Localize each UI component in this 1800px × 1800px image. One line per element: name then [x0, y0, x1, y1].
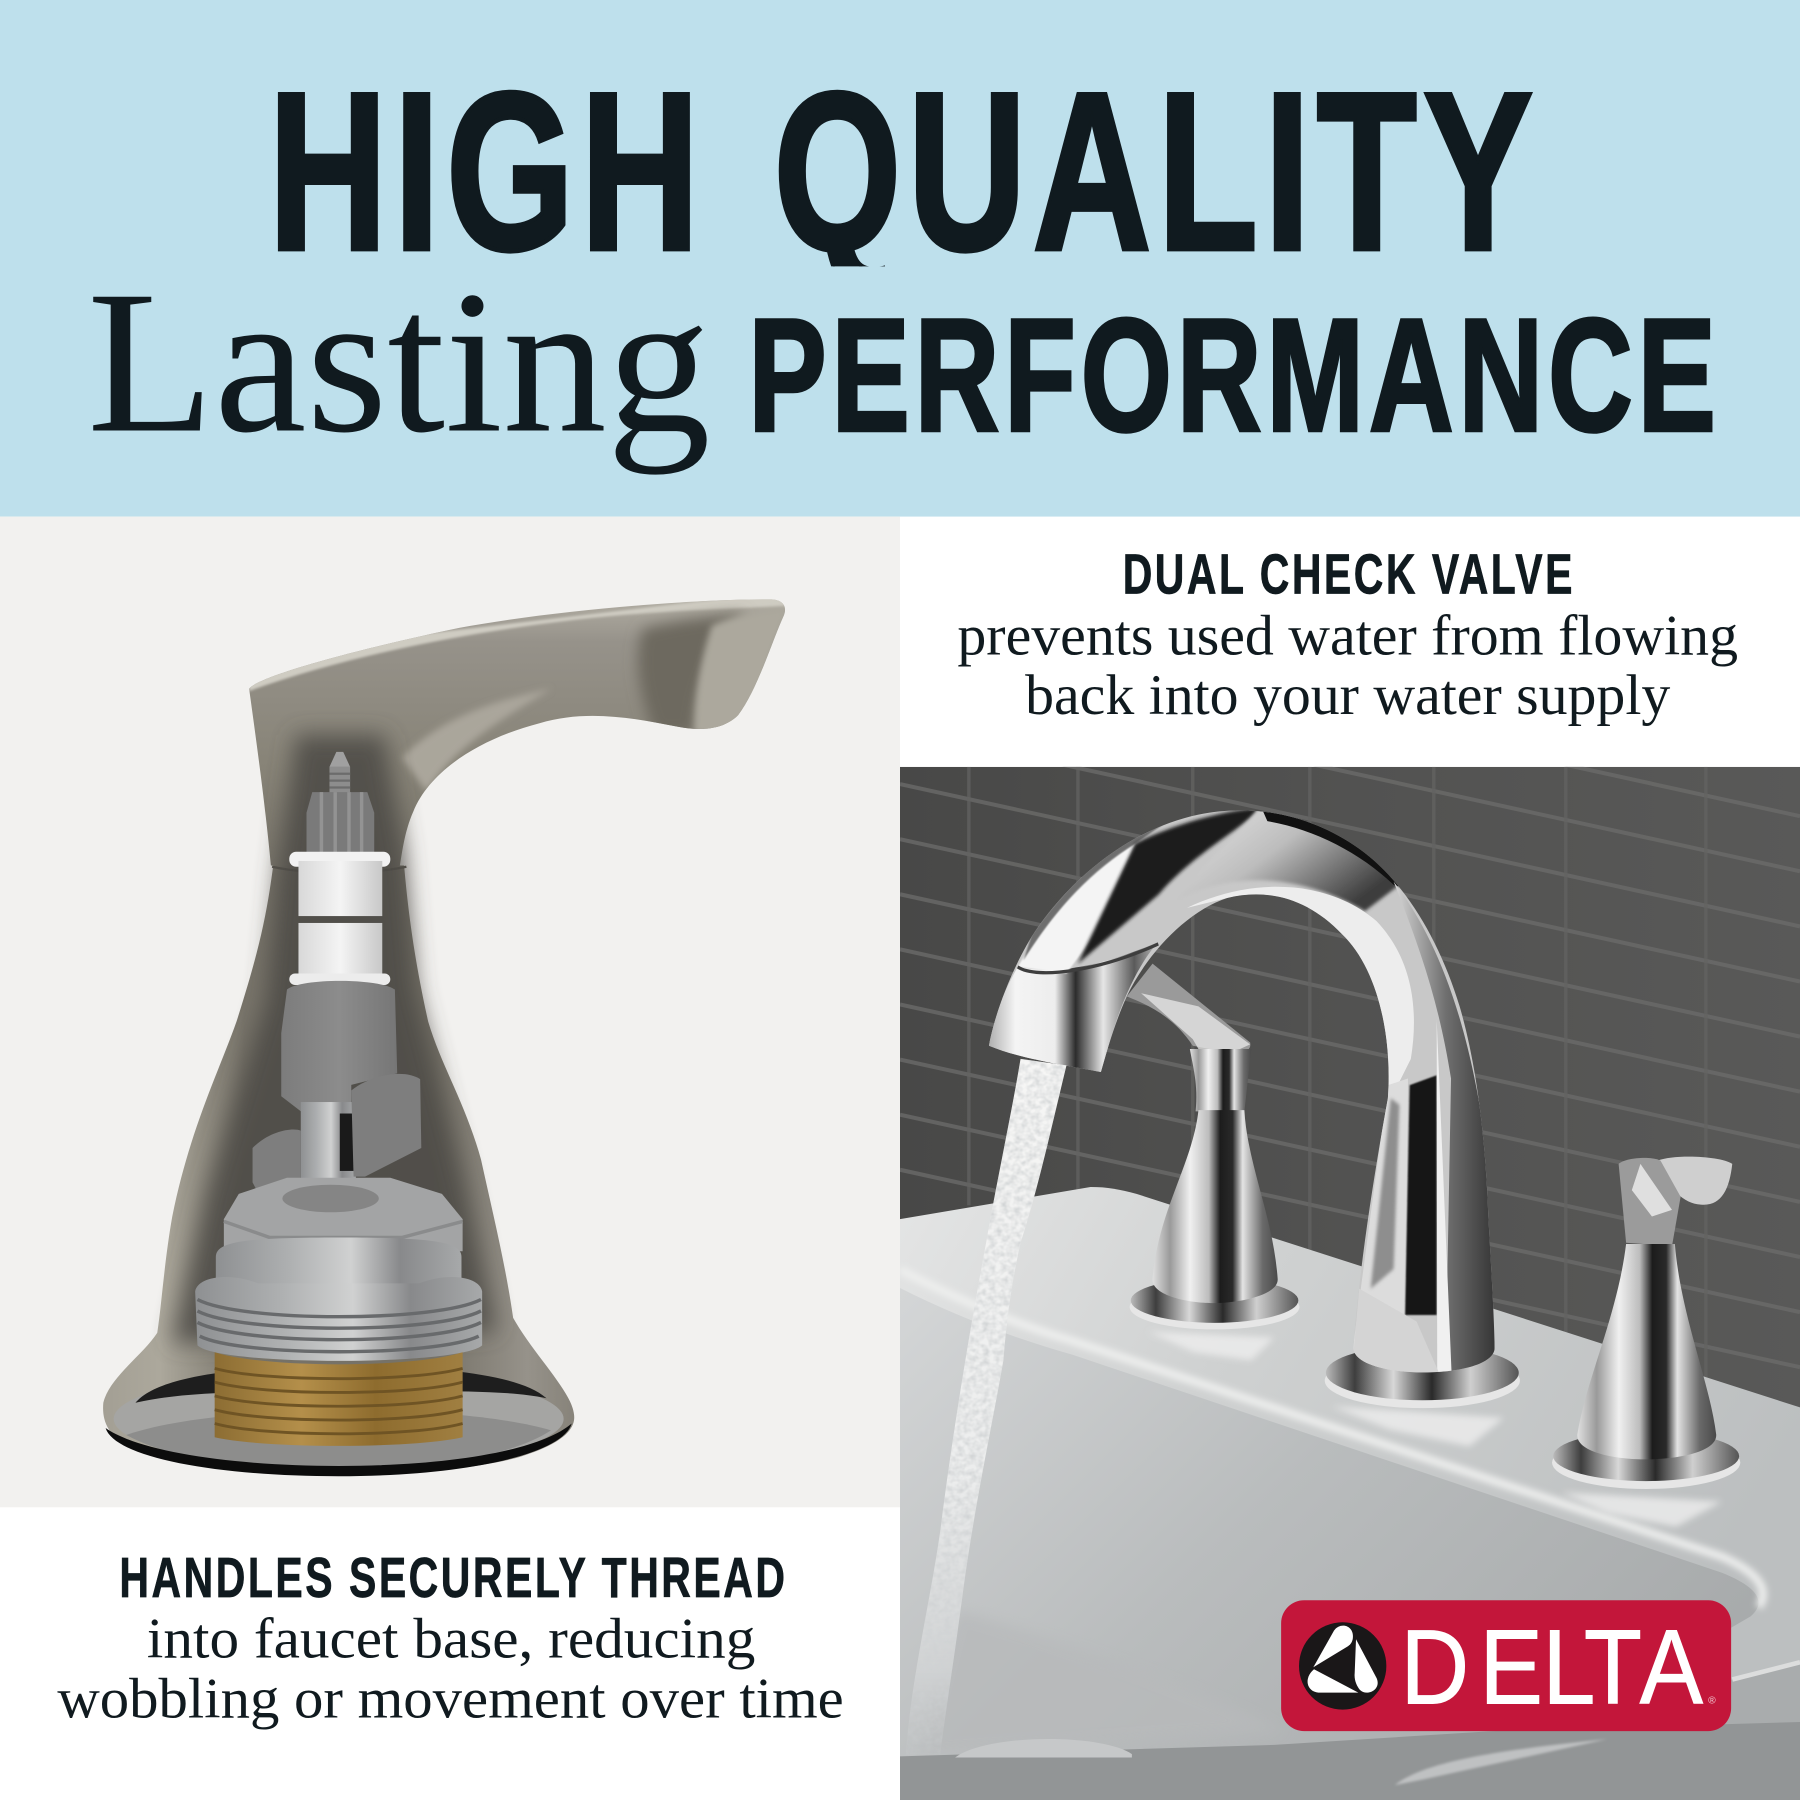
caption line 1: prevents used water from flowing [957, 604, 1738, 667]
deck reflections [1148, 1332, 1722, 1527]
stem [301, 1102, 356, 1205]
left handle [1127, 964, 1299, 1329]
basin inner ridge [960, 1625, 981, 1648]
caption line 2: back into your water supply [1025, 664, 1671, 727]
disc [282, 1185, 379, 1212]
cutaway shadow [172, 735, 496, 1343]
icon: delta mark [1299, 1622, 1386, 1710]
neck seam [272, 867, 406, 873]
lever top highlight [249, 591, 785, 691]
white sleeve [289, 852, 390, 985]
base interior [106, 1366, 572, 1476]
panel: handle cutaway [0, 517, 900, 1507]
registered mark: ® [1708, 1696, 1716, 1707]
right edge highlight [1732, 1662, 1800, 1679]
panel: faucet photo [900, 766, 1800, 1800]
bowl floor [900, 1722, 1800, 1800]
column reflection [1351, 1289, 1445, 1387]
right outer sink [1725, 1664, 1800, 1724]
header band [0, 0, 1800, 517]
rim highlight [900, 1270, 1763, 1607]
brass thread [215, 1352, 463, 1446]
column shade [1371, 1098, 1399, 1289]
handle lever [241, 591, 792, 872]
cartridge [195, 752, 482, 1446]
inner arch bright [1187, 887, 1414, 1105]
caption: handles [57, 1546, 844, 1730]
column white stripe [1437, 1019, 1452, 1387]
title: HIGH QUALITY: HIGH [269, 45, 706, 297]
tile wall [900, 766, 1800, 1408]
spout arch [980, 796, 1508, 1387]
upper edge [1023, 826, 1162, 960]
lever tip shading [638, 614, 746, 735]
spout flange [1324, 1353, 1520, 1408]
upper reflection [1018, 843, 1135, 973]
neck glint [1632, 1164, 1672, 1216]
logo badge [1281, 1600, 1731, 1731]
lever highlight [1141, 993, 1250, 1052]
caption heading: DUAL CHECK VALVE [1123, 542, 1575, 605]
left tab [253, 1130, 301, 1200]
octagon nut [224, 1178, 463, 1251]
handle lever [1127, 964, 1250, 1054]
faucet [906, 796, 1740, 1755]
handle flange [1130, 1285, 1300, 1330]
spout seam [1018, 944, 1158, 973]
caption line 1: into faucet base, reducing [147, 1608, 755, 1671]
grey collar [281, 981, 397, 1111]
basin [900, 1288, 1759, 1800]
screw [329, 752, 350, 799]
column left [1354, 1078, 1408, 1368]
caption line 2: wobbling or movement over time [57, 1667, 844, 1730]
lever curve highlight [402, 689, 551, 792]
right tab [351, 1074, 421, 1177]
sink [900, 1187, 1800, 1800]
handle neck [1190, 1049, 1251, 1111]
title: Lasting: Lasting [87, 249, 711, 475]
handle body [103, 866, 574, 1475]
caption heading: HANDLES SECURELY THREAD [119, 1546, 788, 1609]
nut facet line [224, 1221, 463, 1238]
handle body [1577, 1244, 1716, 1459]
title: HIGH QUALITY [278, 90, 1533, 266]
handle flange [1552, 1431, 1740, 1489]
handle neck [1619, 1158, 1681, 1246]
logo wordmark: DELTA [1401, 1609, 1703, 1727]
water stream [906, 1059, 1066, 1755]
arch right band [1394, 882, 1497, 1387]
caption: dual check valve [957, 542, 1738, 727]
dark wedge [1078, 808, 1259, 964]
silver cylinder [216, 1238, 461, 1291]
spline [307, 792, 374, 861]
handle body [1153, 1110, 1278, 1303]
drain [955, 1739, 1132, 1758]
floor reflection [1395, 1739, 1607, 1785]
spout [980, 796, 1520, 1408]
mid band [1226, 811, 1400, 913]
sink deck [900, 1187, 1800, 1680]
right handle [1552, 1157, 1740, 1489]
handle lever [1658, 1157, 1732, 1205]
nozzle [986, 942, 1158, 1079]
outer dark edge [1263, 812, 1398, 886]
silver thread [195, 1277, 482, 1361]
title: HIGH QUALITY: QUALITY [774, 45, 1539, 297]
column dark stripe [1405, 1075, 1437, 1315]
